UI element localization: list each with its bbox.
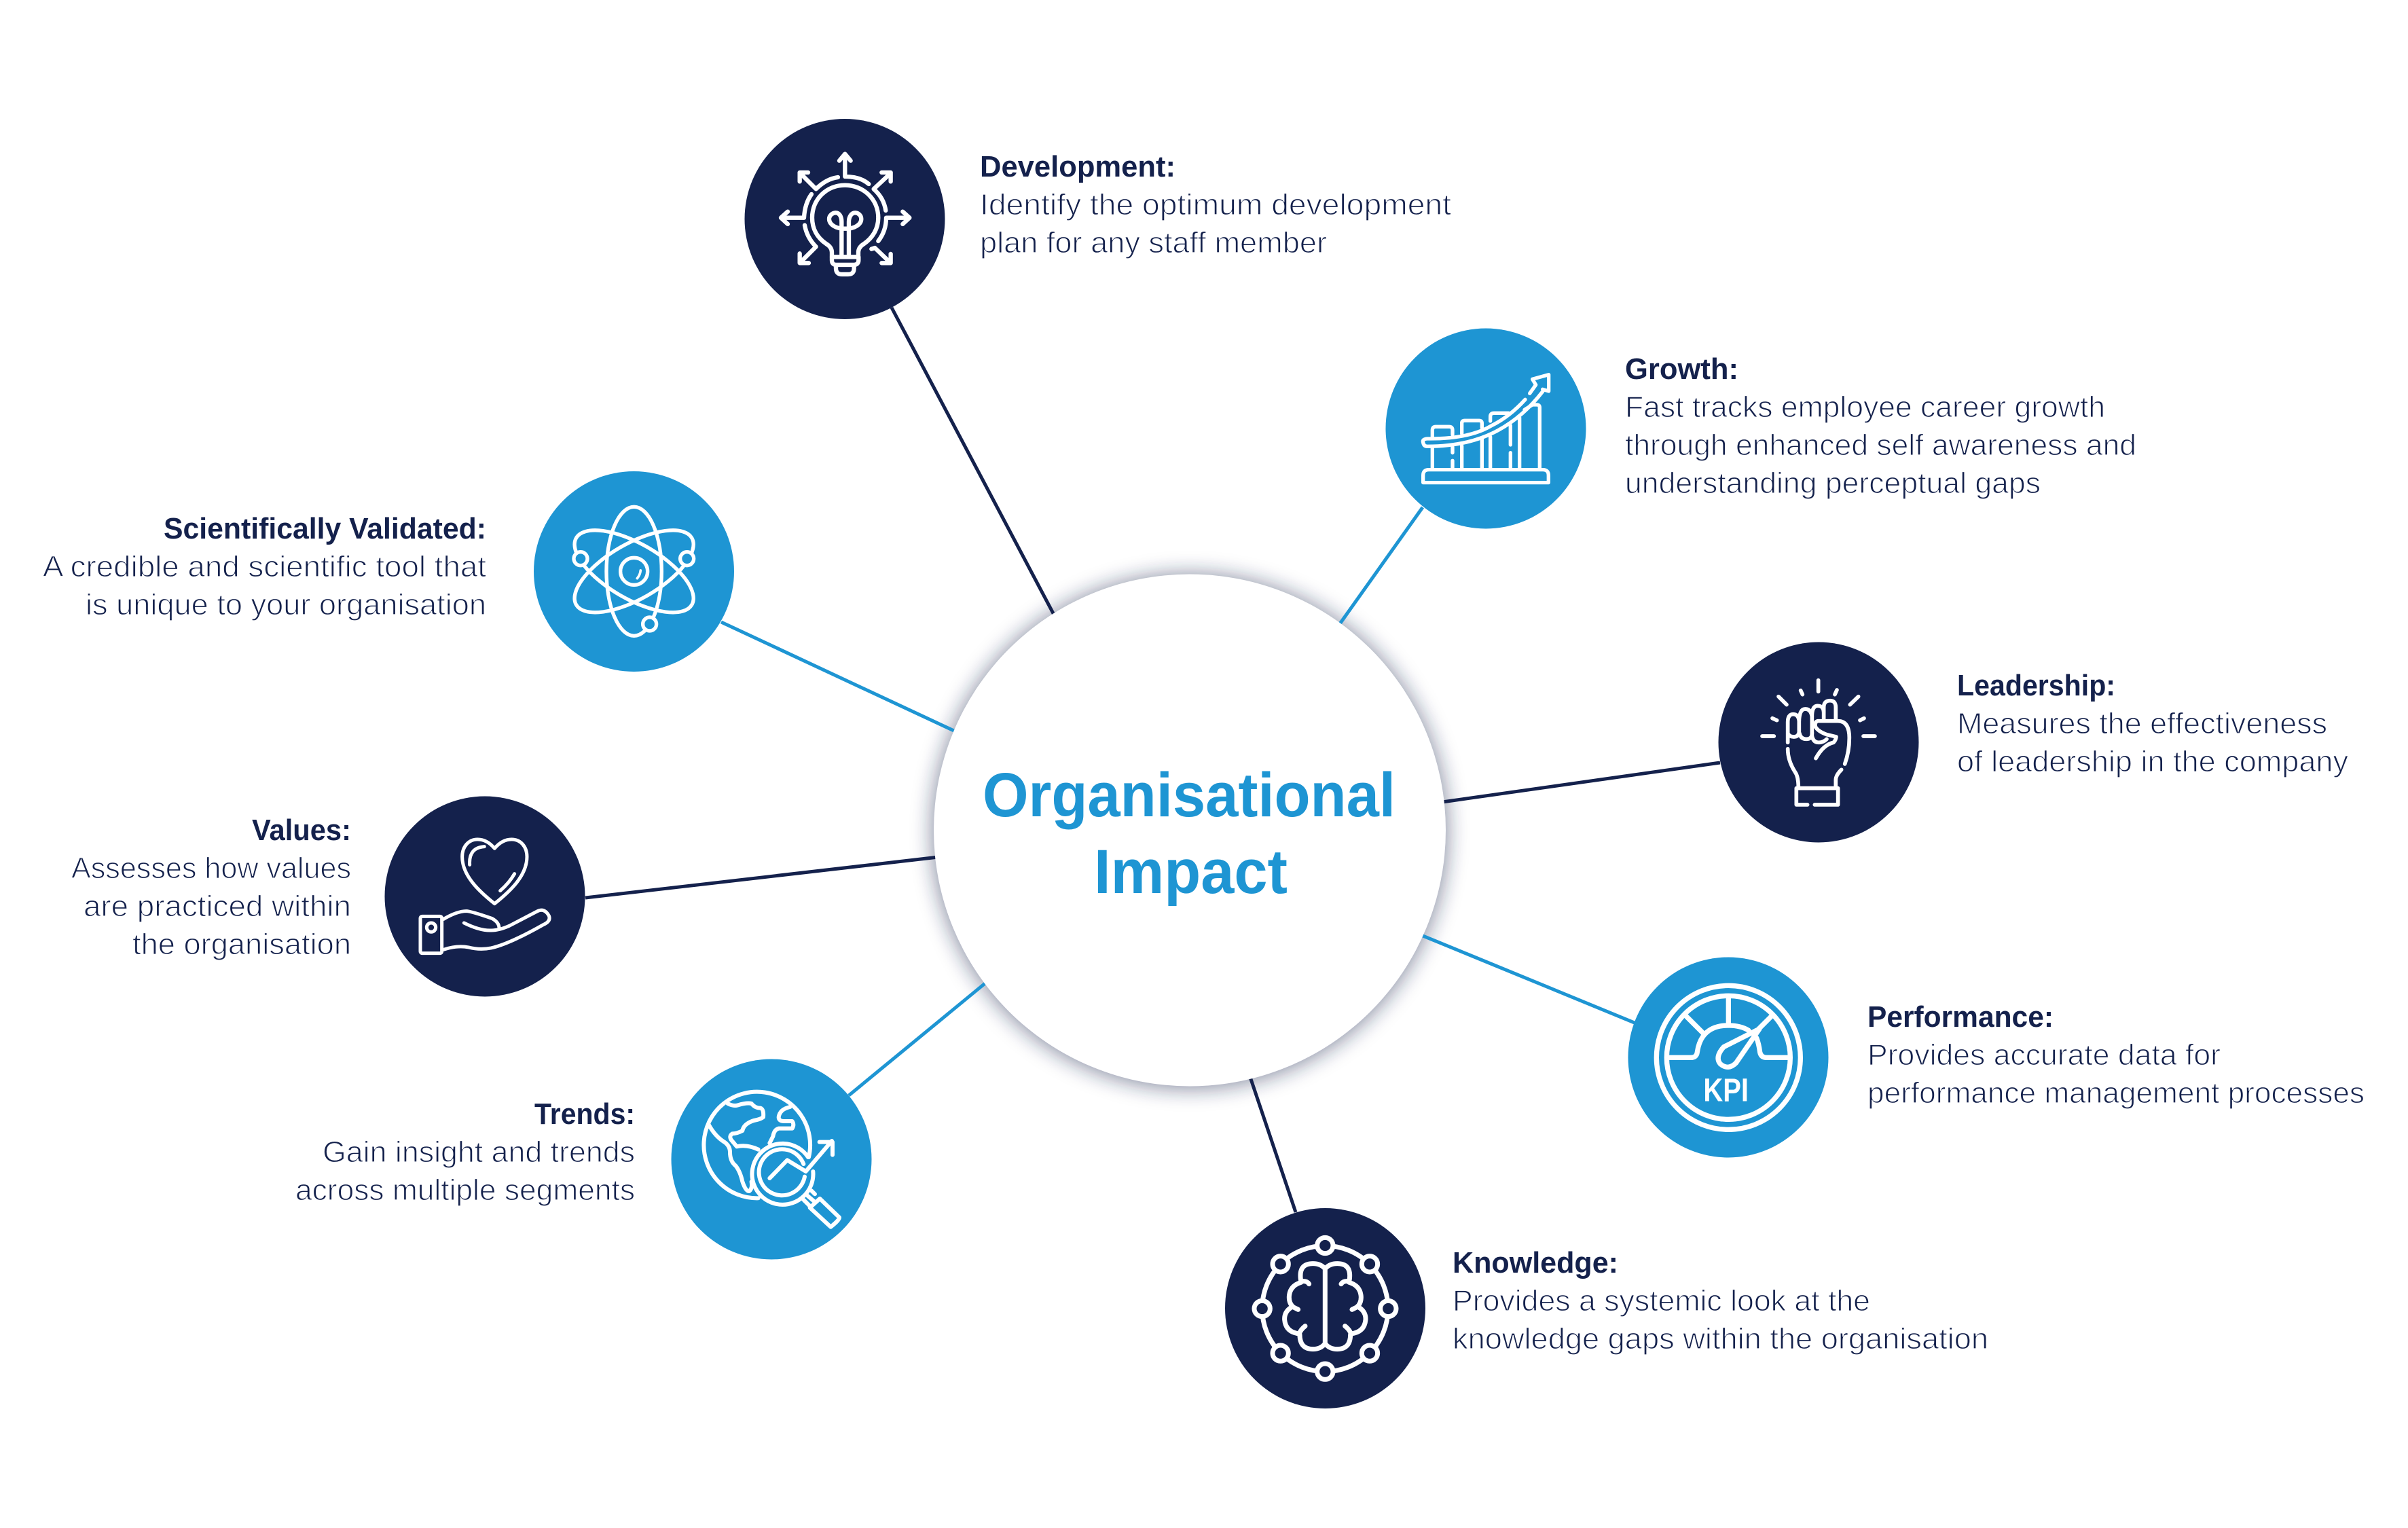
text: trends: across multiple segments (295, 1174, 635, 1207)
text: leadership (1957, 669, 2348, 778)
node: knowledge (1225, 1208, 1425, 1408)
text: trends: Trends: (534, 1097, 635, 1131)
text: growth: through enhanced self awareness and (1625, 429, 2136, 462)
text: growth: understanding perceptual gaps (1625, 467, 2041, 500)
node: trends (671, 1059, 872, 1259)
node: development (744, 119, 945, 319)
text: knowledge: knowledge gaps within the organisation (1453, 1322, 1988, 1356)
icon: rising bar chart (1423, 375, 1549, 483)
text: scientifically validated: is unique to your organisation (86, 588, 486, 621)
connector: scientifically validated (721, 622, 957, 732)
hub shadow (933, 575, 1446, 1088)
text: scientifically validated: Scientifically Validated: (164, 512, 486, 545)
text: performance (1867, 1000, 2365, 1110)
text: knowledge: Knowledge: (1453, 1246, 1618, 1279)
connector: performance (1421, 935, 1635, 1023)
text: trends: Gain insight and trends (323, 1135, 635, 1169)
text: development (980, 150, 1451, 259)
node: values (384, 796, 585, 997)
icon: brain in network ring (1254, 1237, 1396, 1379)
connector: knowledge (1250, 1077, 1296, 1212)
text: leadership: Leadership: (1957, 669, 2115, 702)
icon: atom (562, 507, 706, 636)
text: scientifically validated (43, 512, 486, 621)
text: leadership: Measures the effectiveness (1957, 707, 2327, 740)
text: values: Values: (252, 814, 351, 847)
icon: heart above open hand (420, 839, 549, 953)
text: performance: Provides accurate data for (1867, 1038, 2221, 1072)
node: growth (1385, 329, 1586, 528)
text: values (71, 814, 351, 961)
hub title: Impact (1094, 837, 1288, 907)
text: knowledge (1453, 1246, 1988, 1356)
node: performance (1628, 958, 1828, 1157)
text: values: the organisation (132, 928, 351, 961)
text: leadership: of leadership in the company (1957, 745, 2348, 778)
text: performance: Performance: (1867, 1000, 2054, 1034)
icon: globe with magnifier and trend arrow (704, 1092, 839, 1227)
text: growth (1625, 352, 2136, 500)
node: scientifically validated (534, 471, 734, 672)
text: development: Identify the optimum development (980, 188, 1451, 221)
text: scientifically validated: A credible and scientific tool that (43, 550, 486, 583)
text: values: are practiced within (84, 890, 351, 923)
text: values: Assesses how values (71, 852, 351, 885)
icon: light bulb with arrows (781, 154, 909, 274)
text: development: Development: (980, 150, 1175, 183)
text: performance: performance management processes (1867, 1076, 2365, 1110)
text: development: plan for any staff member (980, 226, 1327, 259)
connector: leadership (1442, 763, 1720, 802)
hub title: Organisational (983, 761, 1395, 830)
node: leadership (1718, 642, 1919, 842)
connector: values (585, 857, 938, 898)
text: knowledge: Provides a systemic look at the (1453, 1284, 1870, 1317)
text: growth: Growth: (1625, 352, 1738, 386)
icon: KPI gauge (1656, 985, 1800, 1129)
text: growth: Fast tracks employee career growth (1625, 390, 2105, 424)
hub title (983, 761, 1395, 907)
text: trends (295, 1097, 635, 1207)
connector lines (585, 308, 1720, 1212)
central hub (934, 575, 1446, 1087)
connector: trends (849, 982, 987, 1095)
icon: raised fist (1762, 680, 1875, 805)
connector: growth (1339, 507, 1423, 625)
connector: development (892, 308, 1055, 616)
icon: KPI gauge: KPI (1703, 1072, 1749, 1109)
